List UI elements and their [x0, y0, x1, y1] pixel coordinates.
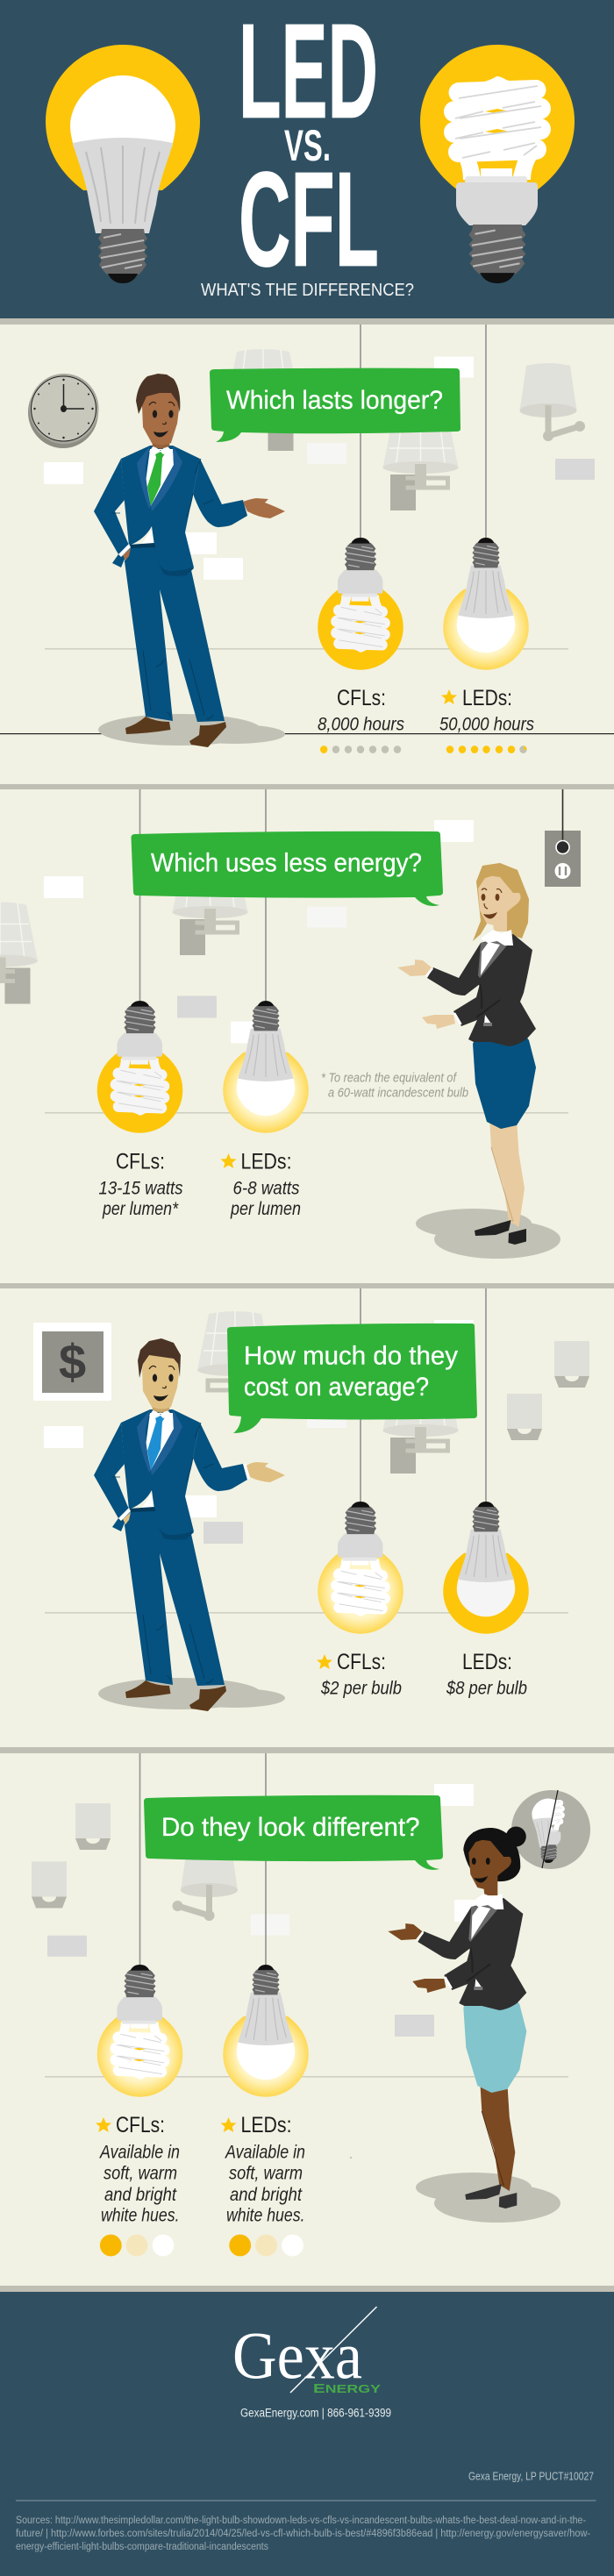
LED description: Available in — [224, 2142, 305, 2163]
LED colour swatches — [229, 2235, 303, 2256]
CFL description: and bright — [104, 2185, 177, 2205]
LED description: and bright — [230, 2185, 303, 2205]
CFL description: Available in — [98, 2142, 180, 2163]
wall decorations — [0, 820, 568, 1114]
footnote: a 60-watt incandescent bulb — [328, 1086, 468, 1100]
speech bubble: Do they look different? — [161, 1813, 419, 1842]
logo: Gexa — [232, 2319, 362, 2393]
icon: wall switch — [545, 789, 581, 887]
CFL hanging bulb — [318, 538, 403, 670]
icon: dollar picture frame: $ — [59, 1334, 86, 1389]
star icon — [96, 2117, 111, 2132]
man character — [94, 1338, 285, 1711]
speech bubble: Which uses less energy? — [151, 849, 422, 877]
CFL value: 8,000 hours — [318, 714, 404, 735]
CFL description: white hues. — [101, 2205, 179, 2226]
LED description: white hues. — [226, 2205, 305, 2226]
wall decorations — [44, 1310, 589, 1614]
speech bubble: How much do they — [244, 1342, 458, 1370]
speech bubble — [210, 368, 460, 442]
shadow under man — [98, 1678, 285, 1709]
logo: E NERGY — [313, 2381, 381, 2396]
speech bubble: cost on average? — [244, 1373, 429, 1402]
lamp cords — [361, 325, 486, 539]
LED label: LEDs: — [240, 1149, 291, 1174]
shadow under woman — [416, 1209, 560, 1259]
footnote: * To reach the equivalent of — [321, 1070, 458, 1086]
LED value: $8 per bulb — [446, 1679, 527, 1698]
CFL label: CFLs: — [337, 1650, 386, 1674]
CFL description: soft, warm — [104, 2163, 177, 2184]
lamp cords — [140, 1753, 266, 1966]
sources: future/ | http://www.forbes.com/sites/trulia/2014/04/25/led-vs-cfl-which-bulb-is-best/#4896f3b86ead | http://energy.gov/energysaver/how- — [16, 2529, 590, 2539]
speech bubble — [132, 831, 443, 906]
section 1: which lasts longer — [0, 325, 614, 753]
LED hanging bulb — [443, 538, 529, 670]
wall decorations — [32, 1784, 568, 2159]
CFL value — [98, 1179, 183, 1219]
star icon — [317, 1654, 332, 1669]
wall decorations — [0, 348, 614, 734]
section 4: appearance — [32, 1753, 590, 2256]
CFL colour swatches — [100, 2235, 174, 2256]
LED label: LEDs: — [462, 686, 512, 710]
CFL description — [98, 2142, 180, 2226]
CFL rating dots — [320, 746, 401, 753]
section 3: cost — [33, 1288, 589, 1711]
divider — [0, 1747, 614, 1753]
LED hanging bulb — [223, 1001, 309, 1133]
title: CFL: CFL — [239, 144, 379, 295]
LED value: 6-8 watts — [233, 1179, 300, 1198]
icon: LED bulb — [46, 45, 200, 283]
section 2: which uses less energy — [0, 789, 581, 1259]
LED value: per lumen — [230, 1199, 301, 1219]
LED label: LEDs: — [240, 2113, 291, 2137]
subtitle: WHAT'S THE DIFFERENCE? — [201, 281, 414, 300]
header panel — [0, 0, 614, 325]
footer panel — [0, 2286, 614, 2576]
CFL value: 13-15 watts — [98, 1179, 183, 1198]
LED label: LEDs: — [462, 1650, 512, 1674]
CFL hanging bulb — [318, 1502, 403, 1634]
speech bubble — [227, 1324, 477, 1433]
title: LED: LED — [239, 0, 378, 146]
man character — [94, 374, 285, 747]
LED value: 50,000 hours — [439, 714, 534, 735]
contact line: GexaEnergy.com | 866-961-9399 — [240, 2407, 391, 2419]
CFL hanging bulb — [97, 1965, 182, 2097]
LED description: soft, warm — [229, 2163, 303, 2184]
CFL hanging bulb — [97, 1001, 182, 1133]
star icon — [221, 1153, 237, 1168]
LED rating dots — [446, 746, 527, 753]
sources: energy-efficient-light-bulbs-compare-traditional-incandescents — [16, 2542, 268, 2552]
woman character — [388, 1826, 526, 2209]
LED description — [224, 2142, 305, 2226]
lamp cords — [140, 789, 266, 1003]
LED value — [230, 1179, 301, 1219]
divider — [0, 1283, 614, 1288]
sources: Sources: http://www.thesimpledollar.com/the-light-bulb-showdown-leds-vs-cfls-vs-incandescent-bulbs-whats-the-best-deal-now-and-in-the- — [16, 2515, 586, 2526]
icon: wall clock — [28, 374, 98, 448]
CFL value: $2 per bulb — [320, 1679, 402, 1698]
LED hanging bulb — [443, 1502, 529, 1634]
CFL value: per lumen* — [102, 1199, 179, 1219]
CFL label: CFLs: — [116, 2113, 165, 2137]
CFL label: CFLs: — [116, 1149, 165, 1174]
icon: dollar picture frame — [33, 1323, 111, 1401]
title: vs.: VS. — [284, 121, 331, 170]
footnote — [321, 1070, 468, 1100]
sources — [16, 2515, 590, 2552]
divider — [0, 784, 614, 789]
star icon — [441, 689, 457, 704]
lamp cords — [361, 1288, 486, 1503]
star icon — [221, 2117, 237, 2132]
shadow under woman — [416, 2173, 560, 2223]
LED hanging bulb — [223, 1965, 309, 2097]
speech bubble — [144, 1795, 443, 1870]
icon: CFL bulb — [420, 45, 575, 283]
woman character — [397, 863, 536, 1245]
CFL label: CFLs: — [337, 686, 386, 710]
speech bubble: Which lasts longer? — [226, 386, 443, 415]
icon: half LED half CFL — [511, 1790, 590, 1869]
shadow under man — [98, 714, 285, 746]
